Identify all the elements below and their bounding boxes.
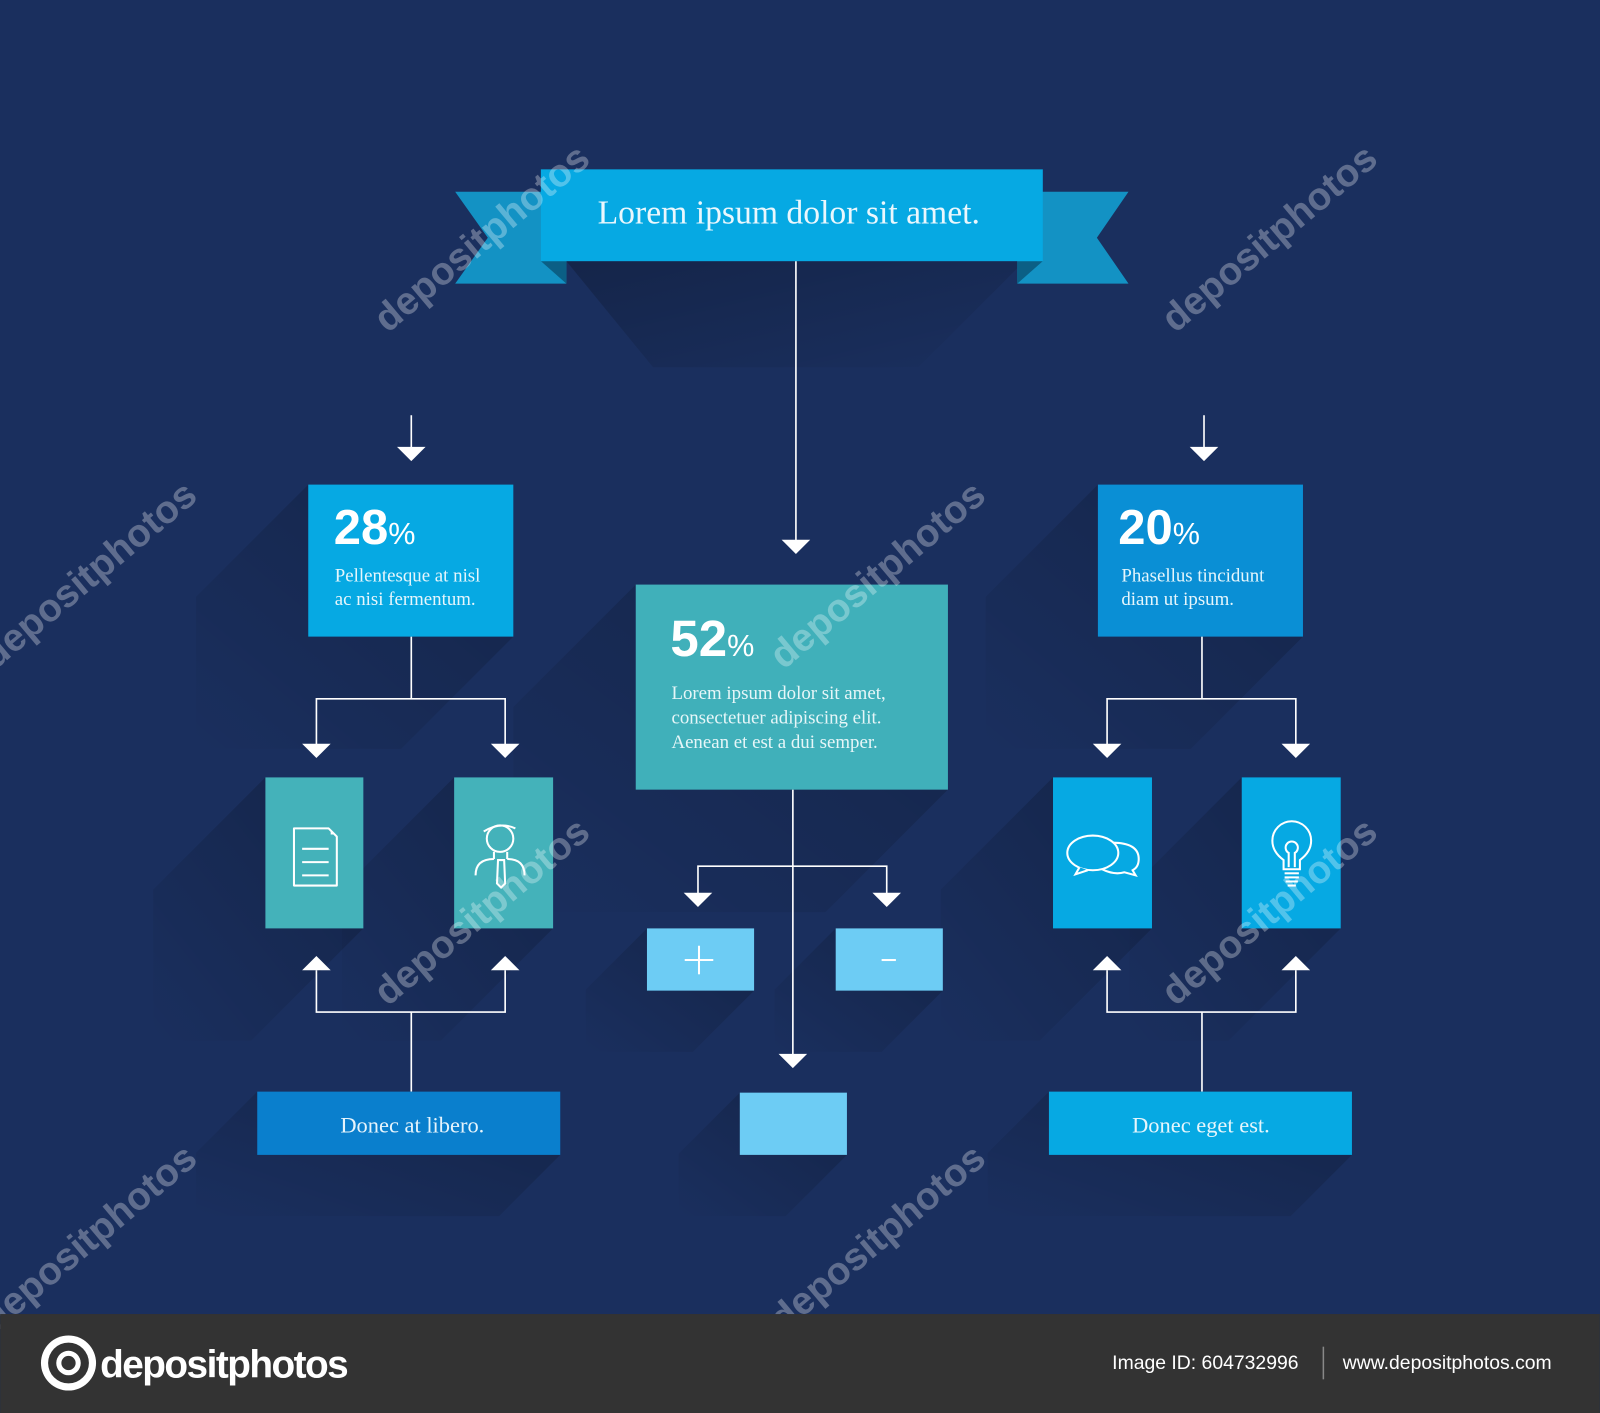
panel: 28%: Pellentesque at nisl (335, 566, 480, 587)
watermarks: depositphotos (1153, 809, 1385, 1014)
bottom box: center (740, 1093, 847, 1155)
minus box (836, 928, 943, 991)
bottom box: Donec at libero (257, 1092, 560, 1155)
watermarks: depositphotos (366, 809, 598, 1014)
arrowheads (302, 447, 1310, 1068)
watermarks: depositphotos (1153, 136, 1385, 341)
footer bar (0, 1314, 1600, 1413)
watermarks: depositphotos (366, 136, 598, 341)
bottom box: Donec eget est (1049, 1092, 1352, 1155)
title ribbon: Lorem ipsum dolor sit amet. (598, 194, 980, 231)
watermarks: depositphotos (762, 473, 994, 677)
plus box (647, 928, 754, 991)
footer bar: www.depositphotos.com (1342, 1352, 1552, 1374)
title ribbon (455, 169, 1129, 284)
icon box: person (454, 777, 553, 928)
footer bar: Image ID: 604732996 (1112, 1352, 1299, 1374)
footer bar: depositphotos (100, 1343, 347, 1386)
watermarks: depositphotos (762, 1136, 994, 1340)
panel: 20%: 20% (1118, 501, 1200, 555)
panel: 52%: consectetuer adipiscing elit. (671, 707, 881, 728)
shadows (153, 485, 1352, 1216)
panel: 52%: 52% (670, 610, 754, 667)
panel: 20%: Phasellus tincidunt (1121, 566, 1265, 587)
panel: 52% (636, 585, 948, 790)
panel: 28%: 28% (334, 501, 415, 555)
icon box: bulb (1242, 777, 1341, 928)
panel: 20%: diam ut ipsum. (1121, 589, 1234, 610)
bottom box: Donec at libero: Donec at libero. (340, 1112, 484, 1137)
panel: 28%: ac nisi fermentum. (335, 589, 476, 610)
icon box: document (265, 777, 363, 928)
icon: camera logo (41, 1335, 96, 1391)
icon box: chat (1053, 777, 1152, 928)
watermarks (0, 136, 1385, 1340)
panel: 28% (308, 485, 513, 637)
connector lines (316, 261, 1296, 1092)
panel: 52%: Lorem ipsum dolor sit amet, (671, 683, 886, 704)
panel: 52%: Aenean et est a dui semper. (671, 732, 878, 753)
bottom box: Donec eget est: Donec eget est. (1132, 1112, 1270, 1137)
panel: 20% (1098, 485, 1303, 637)
